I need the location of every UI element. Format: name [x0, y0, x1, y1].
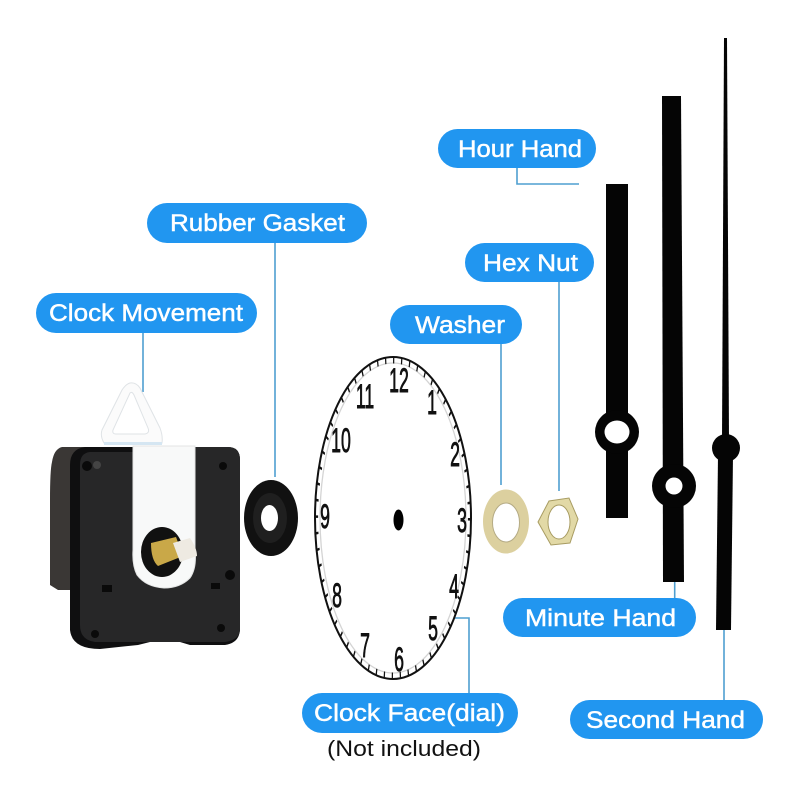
icon: clock face dial: 8: [332, 576, 342, 615]
icon: clock face dial: 7: [360, 626, 370, 665]
icon: second hand: [712, 38, 740, 630]
callout: washer: [390, 305, 522, 344]
callout: clock movement: [36, 293, 257, 333]
callout: hex nut: [465, 243, 594, 282]
callout: second hand: [570, 700, 763, 739]
icon: clock face dial: 11: [356, 377, 374, 416]
icon: hour hand: [595, 184, 639, 518]
icon: clock face dial: 3: [457, 501, 467, 540]
icon: clock movement: [50, 383, 240, 649]
hanger triangle: [101, 383, 162, 443]
callout: minute hand: Minute Hand: [525, 605, 676, 632]
movement case rim: [70, 447, 240, 649]
brass shaft: [151, 537, 183, 566]
callout: rubber gasket: [147, 203, 367, 243]
callout: hour hand: [438, 129, 596, 168]
icon: clock face dial: 5: [428, 609, 438, 648]
callout: clock face: Clock Face(dial): [314, 700, 505, 727]
note: not included: (Not included): [327, 736, 481, 761]
metal bracket: [133, 446, 195, 588]
movement case front: [80, 447, 240, 642]
callout: hour hand: Hour Hand: [458, 136, 582, 163]
movement case side: [50, 447, 90, 590]
icon: clock face dial: 2: [450, 435, 460, 474]
leader lines: [143, 168, 724, 700]
callout: washer: Washer: [415, 312, 505, 339]
icon: rubber gasket: [244, 480, 298, 556]
icon: washer: [483, 490, 529, 554]
callout: second hand: Second Hand: [586, 707, 745, 734]
icon: clock face dial: 9: [320, 497, 330, 536]
icon: clock face dial: 12: [389, 361, 409, 400]
icon: minute hand: [652, 96, 696, 582]
icon: clock face dial: [315, 357, 471, 679]
case holes: [82, 461, 235, 638]
white spindle: [173, 538, 197, 562]
shaft hole: [141, 527, 183, 577]
callout: hex nut: Hex Nut: [483, 250, 578, 277]
callout: minute hand: [503, 598, 696, 637]
icon: clock face dial: 1: [427, 383, 437, 422]
callout: rubber gasket: Rubber Gasket: [170, 210, 345, 237]
icon: hex nut: [538, 498, 578, 545]
icon: clock face dial: 4: [449, 567, 459, 606]
callout: clock face: [302, 693, 518, 733]
icon: clock face dial: 10: [331, 421, 351, 460]
icon: clock face dial: 6: [394, 640, 404, 679]
callout: clock movement: Clock Movement: [49, 300, 243, 327]
